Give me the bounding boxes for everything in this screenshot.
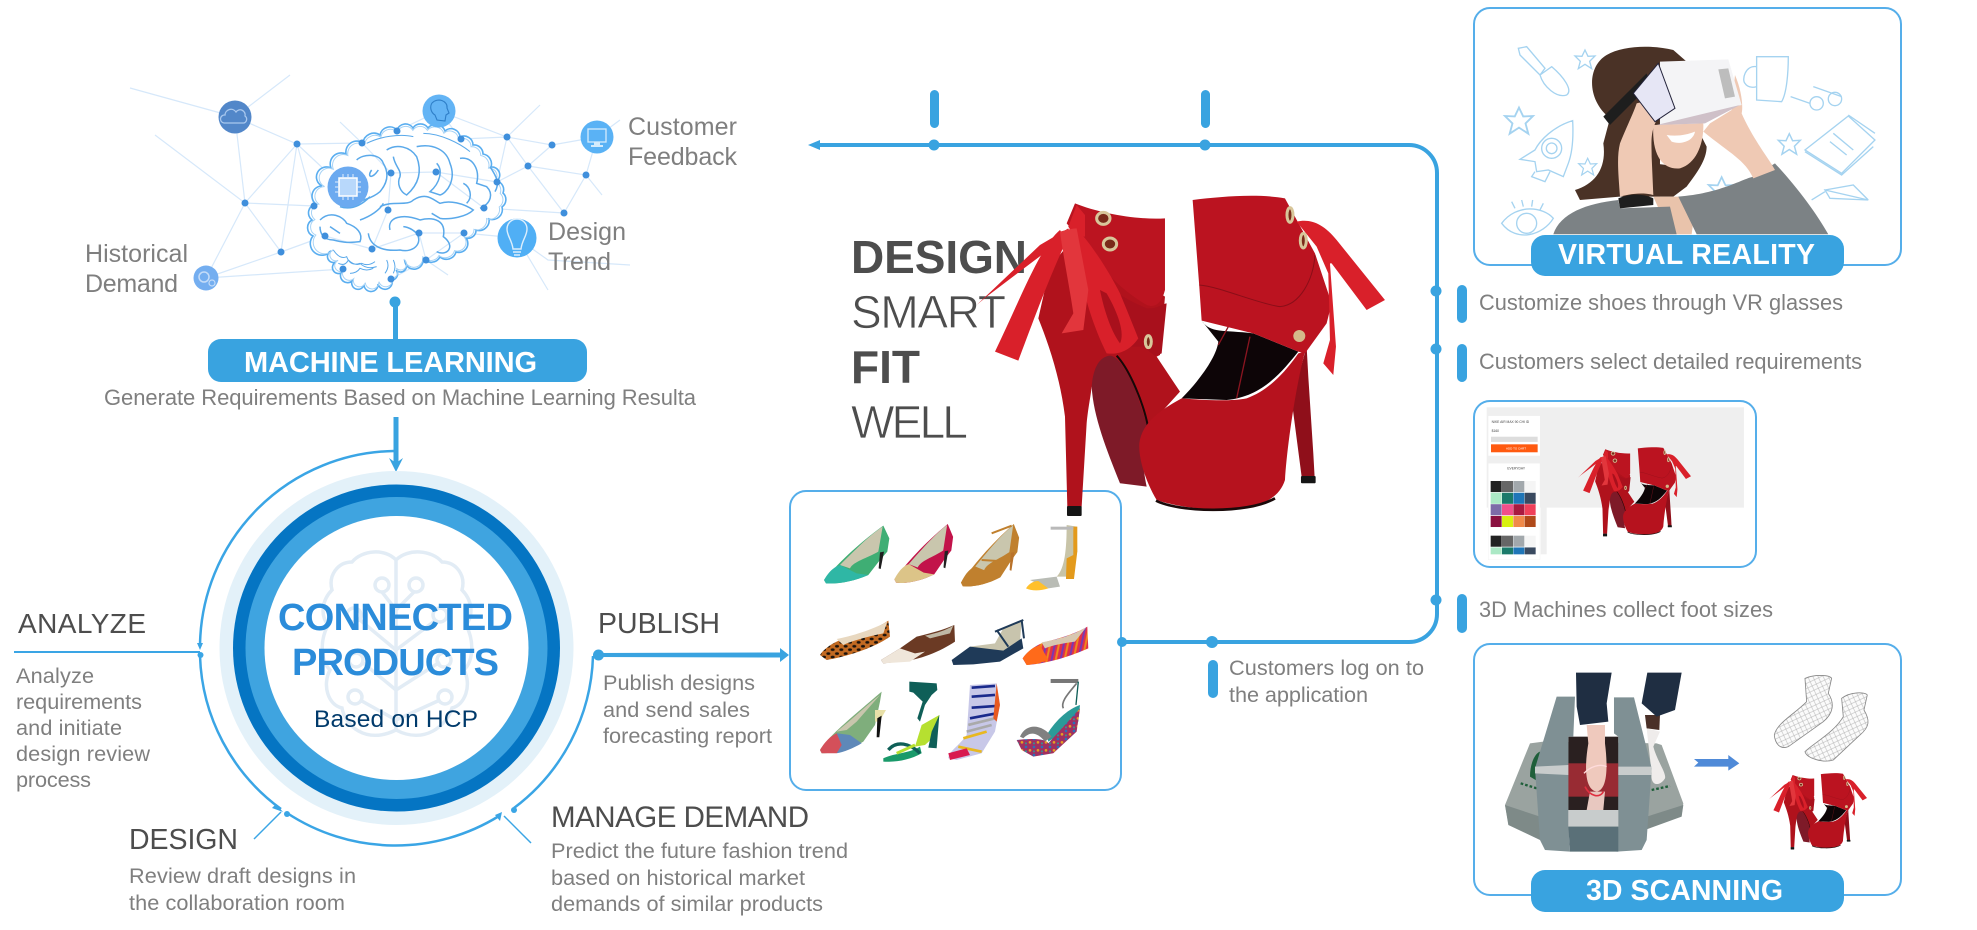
label: analyze [16,608,150,792]
brain folds [320,133,497,273]
brain network lines over lobes [325,143,497,260]
slogan: design smart fit well: DESIGN [851,231,1027,283]
text: select requirements: Customers select detailed requirements [1479,349,1862,374]
label: manage demand: demands of similar products [551,891,823,916]
slogan: design smart fit well: WELL [851,396,968,448]
icon: head [422,94,456,128]
text: based on hcp: Based on HCP [314,706,478,733]
icon: cloud [218,100,252,134]
arrow: machine learning to connected products [389,417,403,472]
label: publish: and send sales [603,697,750,722]
text: design trend [548,218,626,276]
text: customer feedback: Feedback [628,143,738,171]
text: customize shoes: Customize shoes through VR glasses [1479,290,1843,315]
illustration: foot scanner [1505,673,1683,852]
label: analyze: requirements [16,689,142,714]
cycle arrowheads and dots [197,643,517,821]
brain illustration [308,124,506,292]
panel: shoe customizer [1474,401,1756,567]
text: historical demand: Demand [85,270,178,298]
arrow: scan output [1694,755,1739,771]
text: historical demand [85,240,188,298]
arrow: publish [593,648,789,662]
text: design trend: Design [548,218,626,246]
shoes grid [820,524,1088,762]
icon: chip [328,166,368,208]
network connections [130,75,630,290]
label: design: Review draft designs in [129,863,356,888]
label: analyze: design review [16,741,150,766]
customizer screen: NIKE AIR MAX 90 CHI ID [1492,420,1530,424]
illustration: large red shoes [977,196,1385,516]
label: publish [598,608,772,748]
button: 3d scanning [1531,870,1844,912]
diagram: connected products circle [220,471,574,825]
text: generate requirements: Generate Requirements Based on Machine Learning Resulta [104,385,697,410]
panel: shoe collection [790,491,1121,790]
label: analyze: ANALYZE [18,608,146,639]
text: customers log on: Customers log on to [1229,655,1424,680]
label: manage demand: MANAGE DEMAND [551,801,809,834]
illustration: wireframe feet [1774,675,1868,761]
panel: machine learning network [130,75,630,292]
customizer screen: ADD TO CART [1506,446,1526,451]
cycle arcs [14,451,593,845]
heading: connected products [278,597,513,684]
heading: connected products: PRODUCTS [292,642,499,684]
button: 3d scanning: 3D SCANNING [1586,875,1783,907]
label: analyze: Analyze [16,663,94,688]
slogan: design smart fit well [851,231,1027,448]
customizer screen: $160 [1492,429,1499,433]
panel: 3d scanning [1474,644,1901,912]
button: machine learning: MACHINE LEARNING [244,347,537,379]
customizer screen: EVERYDAY [1507,467,1526,471]
icon: light bulb [498,218,536,258]
text: customers log on: the application [1229,682,1368,707]
illustration: red shoes result [1769,773,1867,849]
text: customer feedback [628,113,738,171]
panel: virtual reality [1474,8,1901,276]
network nodes [242,128,590,282]
text: 3d machines: 3D Machines collect foot sizes [1479,597,1773,622]
label: design: DESIGN [129,824,238,856]
button: virtual reality [1531,235,1844,276]
process markers [928,90,1467,698]
icon: faint brain circuit [322,552,472,735]
slogan: design smart fit well: FIT [851,341,920,393]
customizer screen [1487,407,1744,560]
heading: connected products: CONNECTED [278,597,513,639]
label: design: the collaboration room [129,890,345,915]
label: publish: Publish designs [603,670,755,695]
label: manage demand [551,801,848,916]
slogan: design smart fit well: SMART [851,286,1006,338]
label: analyze: and initiate [16,715,122,740]
text: design trend: Trend [548,248,611,276]
label: publish: PUBLISH [598,608,720,640]
text: customer feedback: Customer [628,113,737,141]
icon: monitor [580,120,614,154]
text: historical demand: Historical [85,240,188,268]
label: design [129,824,356,915]
icon: gear [194,266,218,290]
process line [815,145,1437,642]
label: publish: forecasting report [603,723,772,748]
button: machine learning [208,339,587,382]
label: analyze: process [16,767,91,792]
connector: brain to button [390,296,400,340]
arrow head: customer feedback [808,140,820,150]
illustration: woman with VR glasses [1502,47,1875,235]
label: manage demand: Predict the future fashion trend [551,838,848,863]
button: virtual reality: VIRTUAL REALITY [1558,239,1815,271]
text: customers log on [1229,655,1424,707]
label: manage demand: based on historical market [551,865,805,890]
